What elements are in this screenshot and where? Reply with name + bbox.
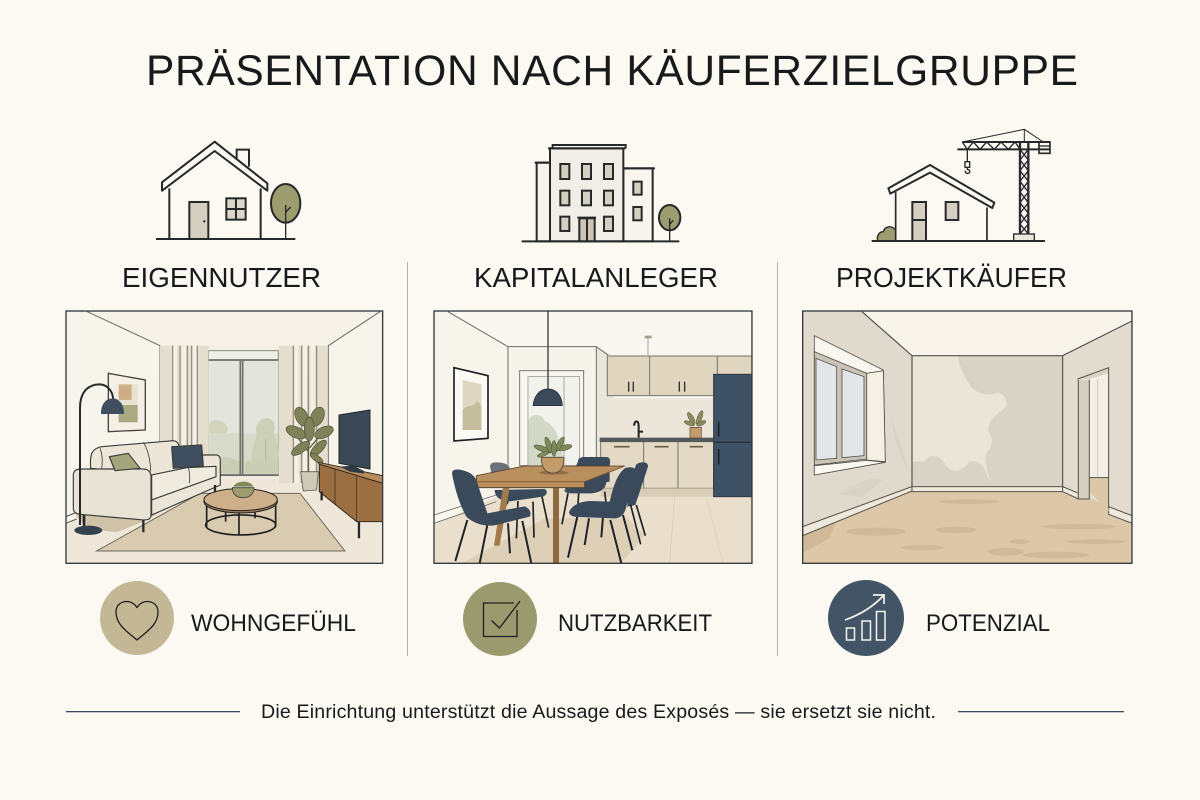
faucet — [634, 421, 643, 438]
table plant — [533, 436, 572, 473]
rug — [97, 493, 345, 551]
panel: living room — [66, 311, 383, 563]
frame — [803, 311, 1132, 563]
badge: Wohngefühl — [100, 581, 356, 655]
title: PRÄSENTATION NACH KÄUFERZIELGRUPPE — [146, 48, 1078, 95]
badge: Nutzbarkeit: NUTZBARKEIT — [558, 610, 712, 637]
tv — [339, 410, 370, 474]
divider right — [777, 262, 778, 656]
back wall — [912, 356, 1063, 487]
front chair left — [452, 470, 531, 563]
frame — [434, 311, 752, 563]
icon: house with crane — [872, 129, 1050, 241]
floor — [804, 500, 1126, 558]
picture — [454, 368, 488, 441]
heading: Kapitalanleger: KAPITALANLEGER — [474, 262, 718, 293]
back chairs — [490, 457, 648, 507]
footer rule right — [958, 711, 1124, 712]
counter — [600, 438, 714, 442]
floor — [434, 488, 752, 563]
lower cabinets — [601, 442, 714, 497]
icon: house — [156, 142, 300, 239]
window — [208, 351, 279, 476]
floor lamp — [74, 384, 124, 535]
bowl — [232, 482, 254, 498]
baseboards and room edges — [803, 487, 1132, 536]
badge: Nutzbarkeit — [463, 582, 712, 656]
panel: kitchen dining — [434, 311, 752, 563]
heading: Eigennutzer: EIGENNUTZER — [122, 262, 321, 293]
heading: Projektkäufer: PROJEKTKÄUFER — [836, 262, 1067, 293]
patio door — [520, 371, 584, 466]
backsplash — [613, 398, 714, 438]
front chair right — [568, 467, 636, 563]
plant — [284, 405, 335, 491]
icon: apartment building — [522, 145, 680, 241]
doorway — [1078, 368, 1109, 512]
sofa — [73, 441, 220, 520]
coffee table — [204, 489, 277, 536]
picture — [108, 373, 145, 432]
pendant lamp — [533, 311, 562, 406]
dining table — [476, 466, 625, 563]
upper cabinets — [607, 336, 752, 396]
tv cabinet — [318, 462, 383, 522]
badge: Potenzial: POTENZIAL — [926, 610, 1050, 637]
badge: Potenzial — [828, 580, 1050, 656]
small plant — [684, 410, 707, 438]
curtains — [160, 346, 328, 483]
divider left — [407, 262, 408, 656]
window — [814, 336, 885, 475]
badge: Wohngefühl: WOHNGEFÜHL — [191, 610, 356, 637]
footer note: Die Einrichtung unterstützt die Aussage des Exposés — sie ersetzt sie nicht. — [261, 701, 936, 723]
wall stains — [839, 415, 908, 497]
panel: empty renovation room — [803, 311, 1132, 563]
fridge — [714, 374, 752, 497]
frame — [66, 311, 383, 563]
footer rule left — [66, 711, 240, 712]
